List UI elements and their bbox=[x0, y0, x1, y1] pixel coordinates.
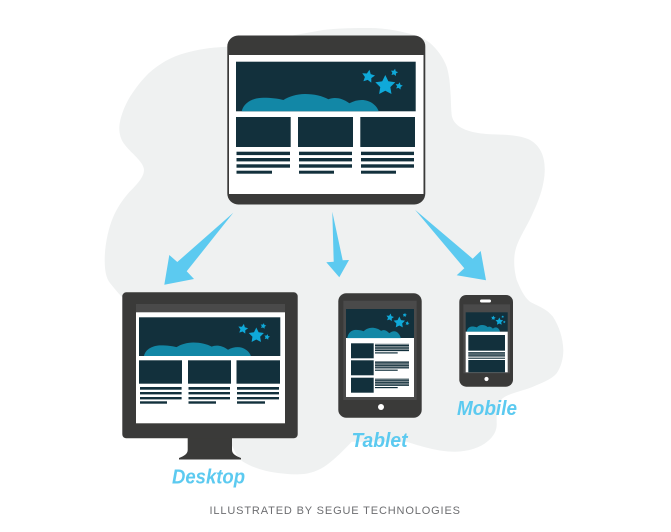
hero banner bbox=[139, 317, 280, 356]
content cards bbox=[139, 360, 280, 384]
hero banner bbox=[346, 309, 414, 338]
credit line: ILLUSTRATED BY SEGUE TECHNOLOGIES bbox=[210, 505, 460, 517]
label: Mobile: Mobile bbox=[457, 398, 517, 420]
tablet device bbox=[338, 293, 422, 418]
desktop monitor bbox=[122, 292, 298, 460]
home button bbox=[484, 377, 489, 381]
monitor stand bbox=[179, 437, 241, 460]
text lines bbox=[236, 152, 414, 174]
browser window bbox=[227, 36, 425, 204]
label: Tablet: Tablet bbox=[352, 430, 409, 452]
content cards bbox=[236, 117, 415, 147]
home button bbox=[378, 404, 384, 410]
content area bbox=[466, 332, 508, 372]
arrow: to tablet bbox=[326, 212, 349, 277]
mobile device bbox=[459, 295, 513, 387]
hero banner bbox=[466, 312, 508, 332]
hero banner bbox=[236, 62, 416, 111]
speaker bbox=[480, 300, 491, 302]
text lines bbox=[140, 387, 279, 404]
label: Desktop: Desktop bbox=[172, 466, 245, 488]
background blob bbox=[105, 28, 563, 474]
content rows bbox=[351, 343, 409, 393]
arrow: to mobile bbox=[415, 210, 486, 280]
arrow: to desktop bbox=[164, 213, 233, 285]
